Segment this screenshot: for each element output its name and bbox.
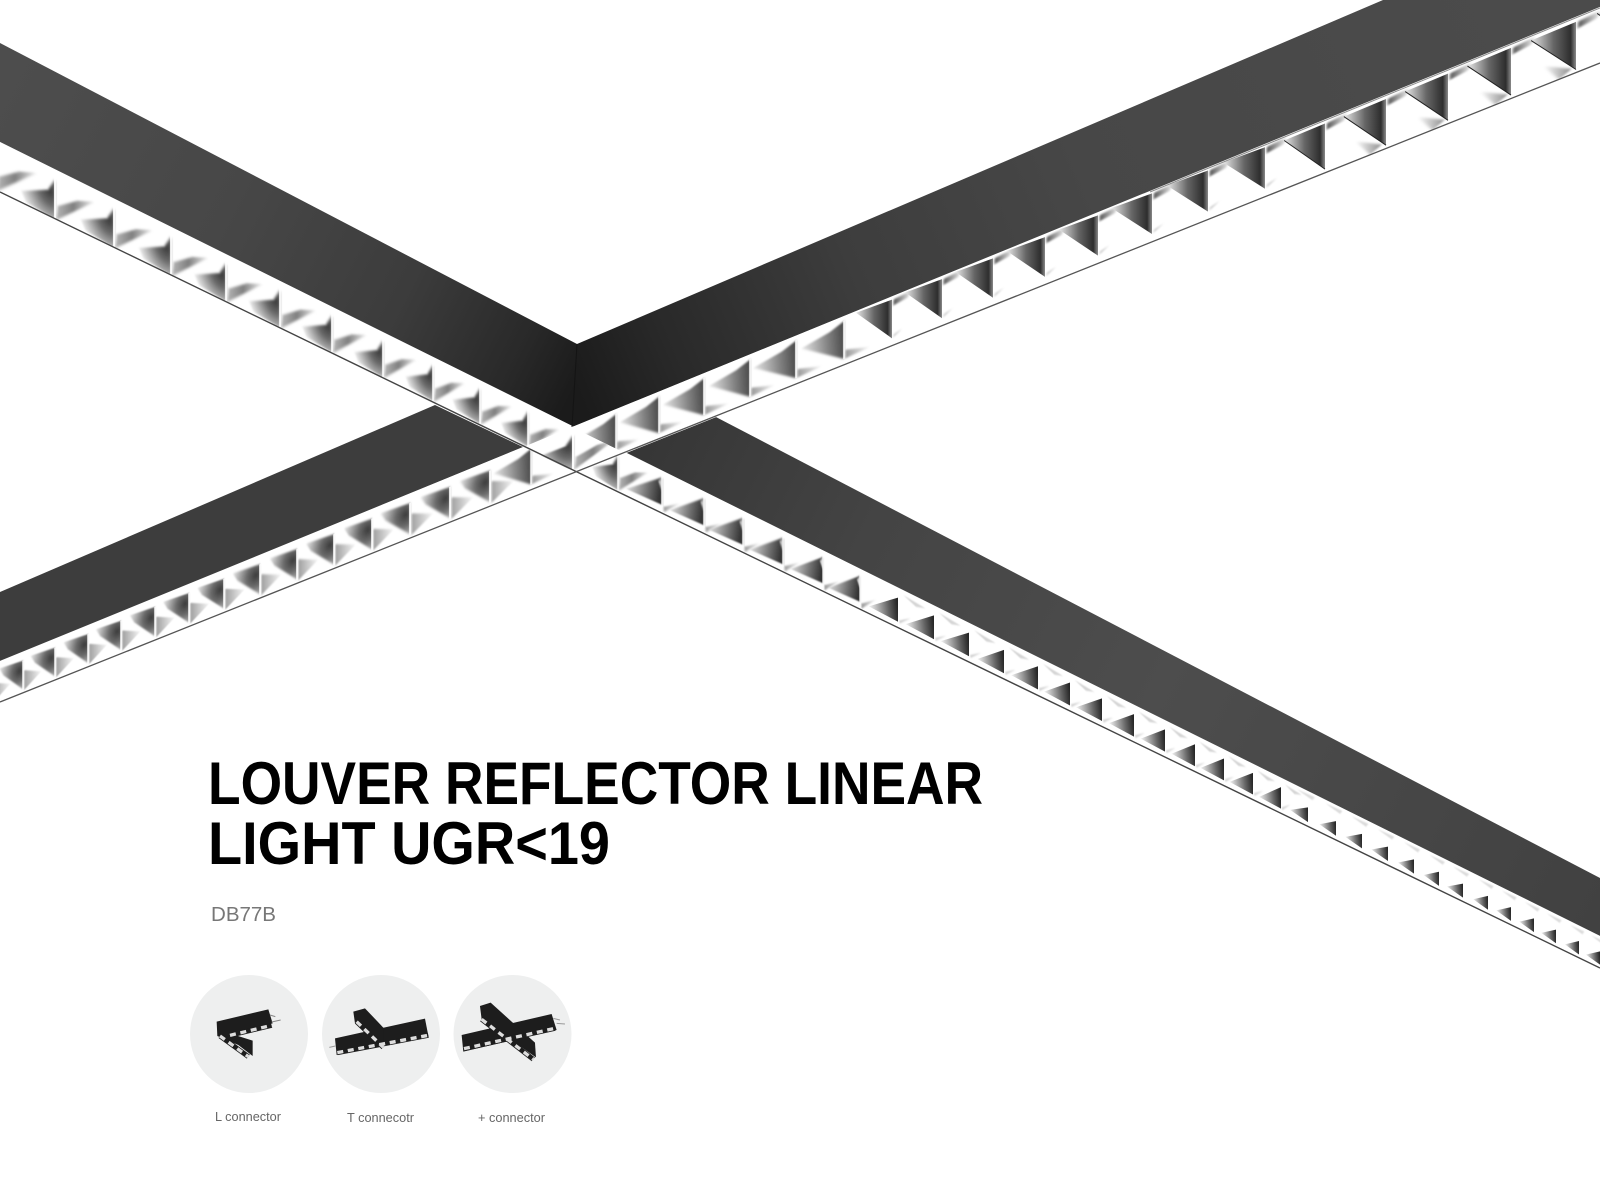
connector: T (322, 975, 440, 1125)
model number: DB77B (211, 904, 276, 926)
icon: T connector (329, 1008, 429, 1055)
louver cells: falling run (0, 99, 1600, 967)
beam: lower right dark housing (623, 416, 1600, 937)
title (208, 750, 983, 877)
beam: upper right dark housing (572, 0, 1600, 427)
connector: plus (454, 975, 572, 1125)
icon circle: L connector (190, 975, 308, 1093)
louver strip: white reflector band, bottom-right run (0, 143, 1600, 968)
icon: + connector (462, 1003, 565, 1059)
title: LOUVER REFLECTOR LINEAR (208, 750, 983, 817)
beam: lower left dark housing (0, 405, 523, 662)
icon: L connector (217, 1009, 281, 1057)
icon circle: T connector (322, 975, 440, 1093)
louver cells: rising run (0, 0, 1600, 712)
louver strip: white reflector band, top-right run (0, 8, 1600, 702)
crossing cell: centre of the X (526, 434, 619, 470)
label: L connector: L connector (215, 1109, 282, 1124)
connector: L (190, 975, 308, 1124)
label: + connector: + connector (478, 1110, 546, 1125)
icon circle: + connector (454, 975, 572, 1093)
title: LIGHT UGR<19 (208, 810, 610, 877)
edge lines along the reflector strips (0, 8, 1600, 968)
label: T connector: T connecotr (347, 1110, 415, 1125)
beam: upper left dark housing (0, 43, 577, 427)
